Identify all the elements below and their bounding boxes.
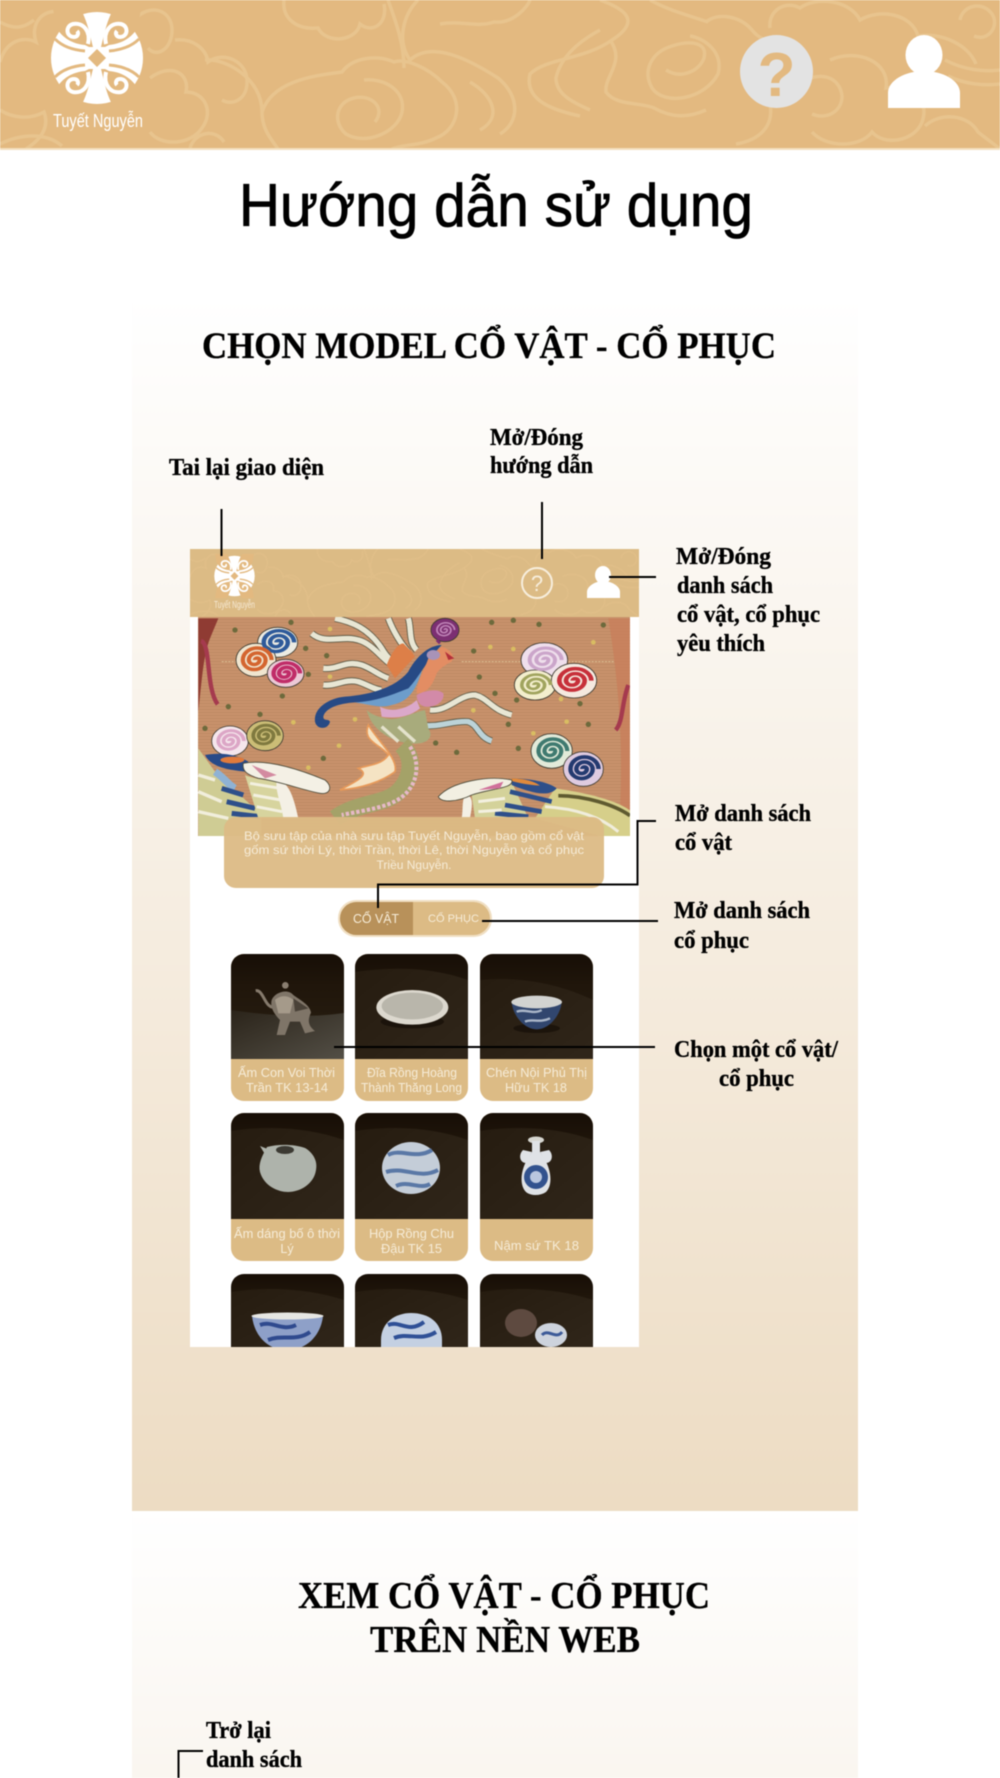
- card: Ly dynasty pot: Lý: [280, 1242, 294, 1256]
- app header bar: [190, 549, 639, 617]
- icon: help question mark: [740, 35, 813, 110]
- label: open costume list: Mở danh sách: [674, 898, 810, 924]
- crest feathers: [312, 618, 512, 741]
- label: open or close guide: [490, 425, 593, 559]
- label: open artifact list: [378, 801, 811, 908]
- card: imperial bowl: Hữu TK 18: [505, 1081, 567, 1095]
- card: small flask: Nậm sứ TK 18: [494, 1239, 579, 1253]
- label: back to list: [178, 1718, 302, 1778]
- label: open artifact list: cổ vật: [675, 830, 732, 856]
- panel: view on web: [132, 1511, 858, 1778]
- label: pick an artifact: [334, 1037, 838, 1092]
- label: open or close guide: Mở/Đóng: [490, 425, 583, 451]
- label: open or close favourites: Mở/Đóng: [676, 544, 771, 570]
- description box: gốm sứ thời Lý, thời Trần, thời Lê, thời Nguyễn và cổ phục: [244, 842, 584, 857]
- icon: Tuyết Nguyễn logo: [51, 8, 143, 131]
- icon: Tuyết Nguyễn logo: Tuyết Nguyễn: [53, 110, 143, 131]
- label: open artifact list: Mở danh sách: [675, 801, 811, 827]
- card: two fragments: [480, 1274, 593, 1347]
- toggle: cổ vật / cổ phục: [338, 900, 492, 937]
- icon: help question mark: ?: [758, 41, 795, 110]
- card: dragon dish: [355, 954, 468, 1101]
- right wing: [535, 788, 632, 838]
- heading: view on web: [298, 1574, 710, 1661]
- toggle: cổ vật / cổ phục: CỔ PHỤC: [428, 912, 479, 925]
- label: open or close favourites: yêu thích: [677, 631, 765, 657]
- card: elephant ewer: [231, 954, 344, 1101]
- icon: user profile: [888, 35, 960, 108]
- phoenix flames: [340, 725, 395, 790]
- label: back to list: danh sách: [206, 1747, 302, 1773]
- phoenix body: [367, 710, 430, 744]
- toggle: cổ vật / cổ phục: CỔ VẬT: [353, 911, 399, 926]
- card: imperial bowl: [480, 954, 593, 1101]
- heading: view on web: XEM CỔ VẬT - CỔ PHỤC: [298, 1574, 710, 1617]
- label: open or close guide: hướng dẫn: [490, 453, 593, 479]
- page header banner: [0, 0, 1000, 150]
- label: pick an artifact: cổ phục: [719, 1066, 794, 1092]
- card: elephant ewer: Trần TK 13-14: [246, 1081, 328, 1095]
- phoenix tail: [335, 745, 410, 818]
- card: dragon dish: Đĩa Rồng Hoàng: [367, 1066, 457, 1080]
- icon: app logo: Tuyết Nguyễn: [214, 598, 255, 611]
- description box: Triều Nguyễn.: [377, 857, 451, 872]
- heading: view on web: TRÊN NỀN WEB: [370, 1618, 640, 1661]
- icon: app user: [587, 566, 620, 598]
- left wing: [198, 748, 262, 838]
- description box: [224, 817, 604, 888]
- embroidered phoenix image: [198, 617, 635, 838]
- heading: choose model: CHỌN MODEL CỔ VẬT - CỔ PHỤC: [202, 324, 776, 367]
- card: blue and white bowl: [231, 1274, 344, 1350]
- card: dragon dish: Thành Thăng Long: [361, 1081, 462, 1095]
- card: small flask: [480, 1113, 593, 1261]
- label: back to list: Trở lại: [206, 1718, 271, 1744]
- label: open or close favourites: cổ vật, cổ phục: [677, 602, 820, 628]
- card: Ly dynasty pot: Ấm dáng bố ô thời: [234, 1226, 340, 1241]
- embroidered clouds: [212, 618, 603, 786]
- label: open or close favourites: [609, 544, 820, 657]
- card: imperial bowl: Chén Nội Phủ Thị: [486, 1066, 587, 1080]
- row of clipped artifact cards: [231, 1274, 593, 1350]
- label: reload interface: Tai lại giao diện: [169, 455, 324, 481]
- icon: app help: [522, 568, 552, 598]
- title: Hướng dẫn sử dụng: [239, 172, 753, 239]
- card: Chu Dau dragon box: [355, 1113, 468, 1261]
- card: Chu Dau dragon box: Hộp Rồng Chu: [369, 1227, 454, 1241]
- card: Ly dynasty pot: [231, 1113, 344, 1261]
- card: lidded box: [355, 1274, 468, 1350]
- icon: app help: ?: [531, 571, 543, 596]
- panel: choose model: [132, 300, 858, 1511]
- description box: Bộ sưu tập của nhà sưu tập Tuyết Nguyễn, bao gồm cổ vật: [244, 828, 585, 843]
- card: elephant ewer: Ấm Con Voi Thời: [238, 1065, 335, 1080]
- app screenshot mockup: [190, 549, 639, 1350]
- icon: app logo: [214, 554, 255, 611]
- label: pick an artifact: Chọn một cổ vật/: [674, 1037, 838, 1063]
- card: Chu Dau dragon box: Đậu TK 15: [381, 1242, 442, 1256]
- label: open costume list: cổ phục: [674, 928, 749, 954]
- label: open or close favourites: danh sách: [677, 573, 773, 599]
- label: open costume list: [482, 898, 810, 954]
